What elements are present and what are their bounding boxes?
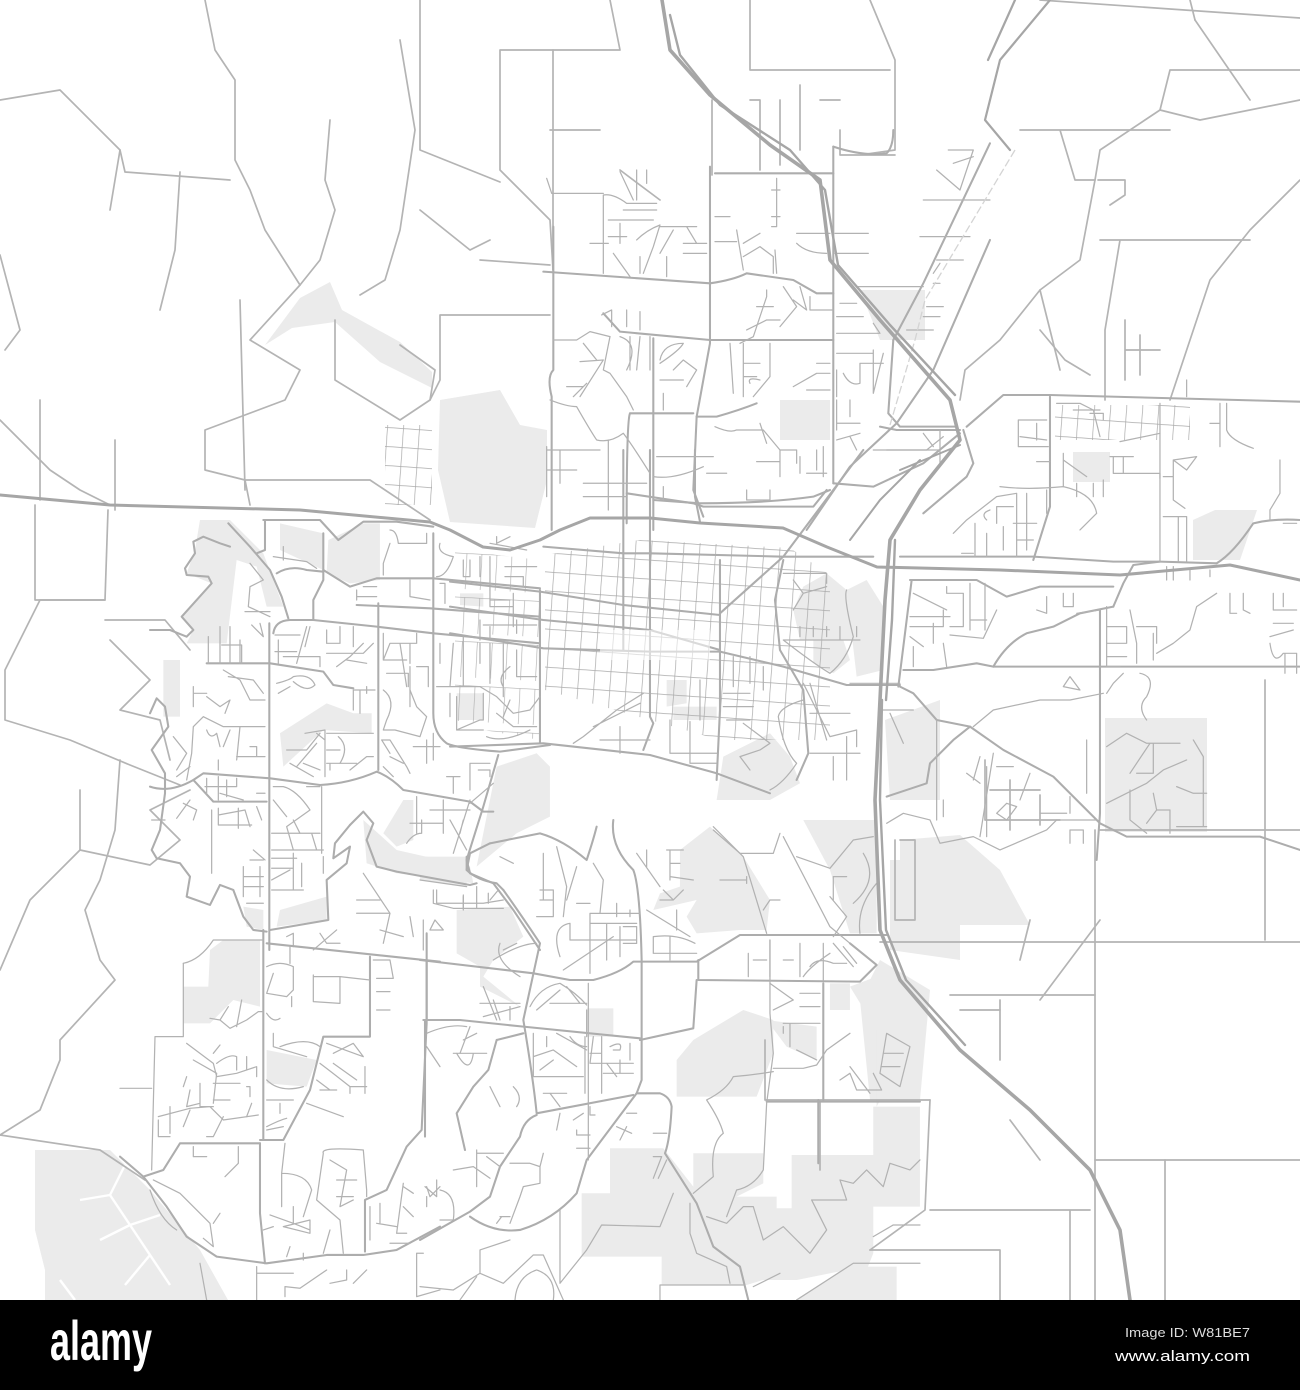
map: southern district streets <box>420 820 920 1300</box>
map: washed-out downtown core <box>600 630 710 660</box>
map: lake in south-west park <box>60 1165 170 1300</box>
black footer bar <box>0 1300 1300 1390</box>
map: central district streets <box>450 450 900 793</box>
map: downtown street grid <box>385 405 1190 740</box>
map: parks and green areas <box>35 282 1257 1300</box>
website url: www.alamy.com <box>1114 1348 1250 1365</box>
map: south-western district streets <box>120 930 440 1300</box>
image id: Image ID: W81BE7 <box>1125 1325 1250 1340</box>
logo: alamy: alamy <box>50 1309 152 1372</box>
map: railway line <box>890 150 1015 425</box>
map: eastern district streets <box>880 380 1300 860</box>
map: western district streets <box>150 520 550 950</box>
map: northern district streets <box>543 130 990 530</box>
